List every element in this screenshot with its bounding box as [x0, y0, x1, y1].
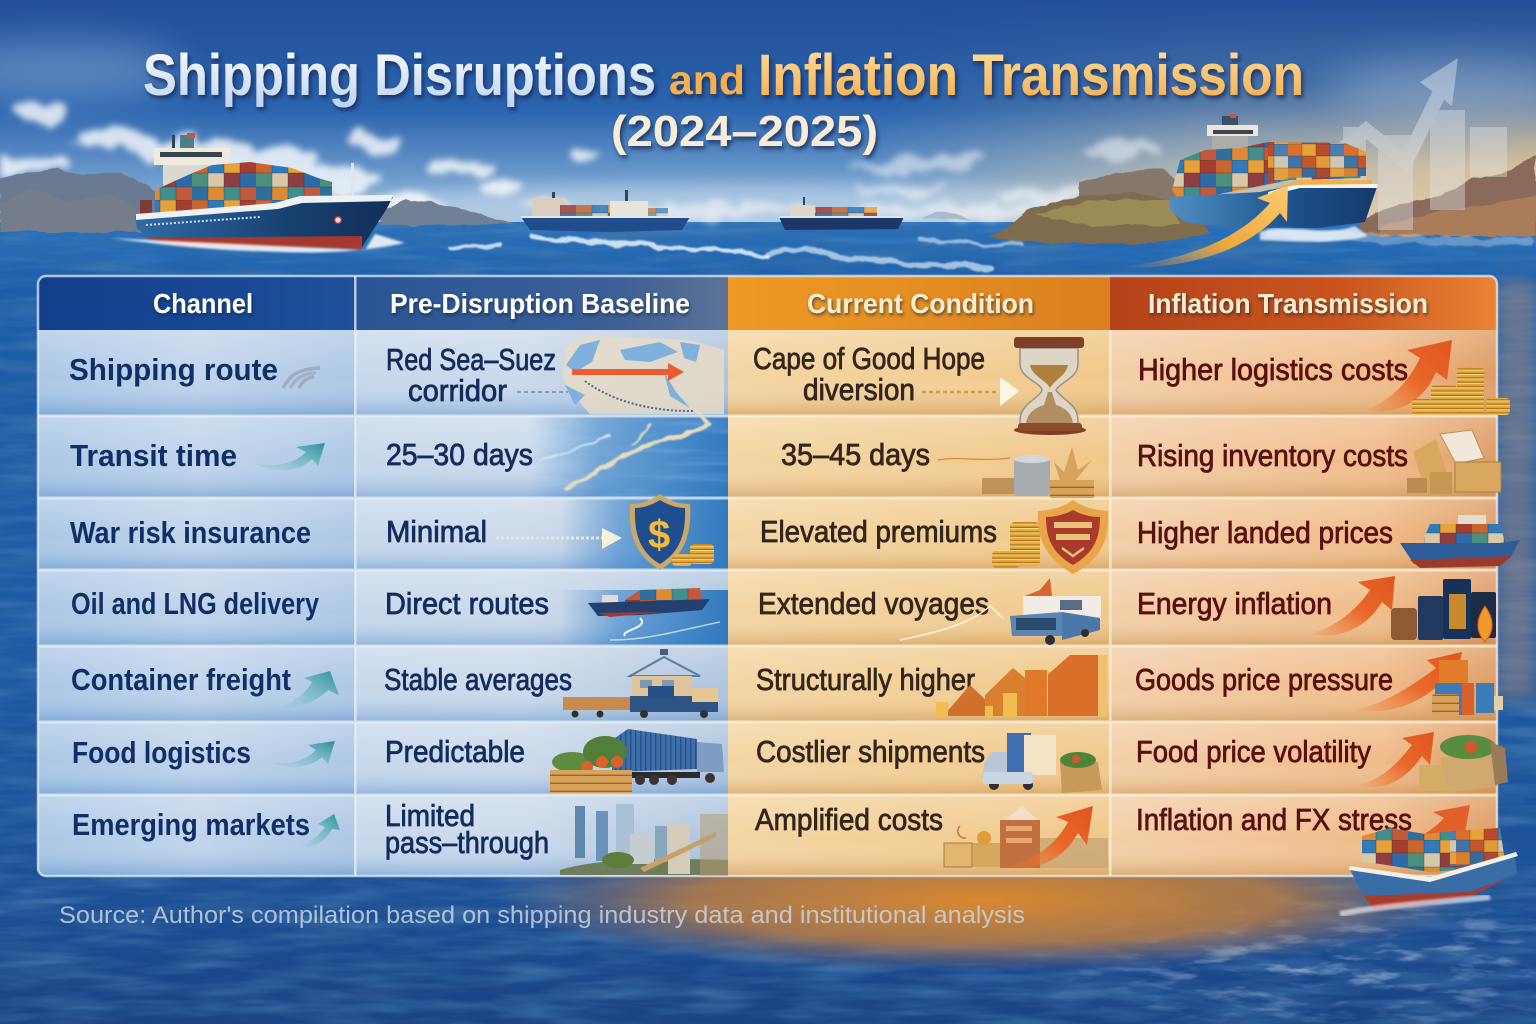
ship: large right: [1125, 114, 1378, 268]
inflation: energy inflation: Energy inflation: [1137, 586, 1332, 621]
title: and: and: [669, 57, 745, 103]
icon: truck: [900, 578, 1101, 645]
channel: emerging markets: Emerging markets: [72, 807, 310, 842]
ship: bottom right: [1340, 828, 1518, 914]
icon: rising bars and roofs: [936, 655, 1107, 718]
icon: delivery truck and bag: [982, 733, 1102, 793]
icon: shield with dollar: [630, 494, 714, 570]
header: current condition: Current Condition: [807, 288, 1034, 319]
inflation: higher logistics costs: Higher logistics costs: [1138, 352, 1408, 387]
icon: small cargo ship: [588, 588, 720, 640]
current: structurally higher: Structurally higher: [756, 662, 975, 697]
ship: large left: [110, 133, 405, 253]
current: cape of good hope diversion: Cape of Good Hope: [753, 341, 985, 376]
background: sea: [0, 222, 1536, 1024]
icon: road arrow grey: [283, 368, 320, 388]
source note: Source: Author's compilation based on shipping industry data and institutional analysis: [59, 902, 1025, 929]
icon: hourglass: [1014, 337, 1086, 435]
current: cape of good hope diversion: [753, 341, 985, 407]
current: amplified costs: Amplified costs: [755, 802, 943, 837]
icon: sea route path: [540, 412, 708, 488]
header: inflation transmission: Inflation Transmission: [1148, 288, 1428, 319]
current: cape of good hope diversion: diversion: [803, 372, 915, 407]
icon: boxes and papers: [1407, 430, 1501, 494]
icon: dashed arrow to hourglass: [922, 377, 1019, 406]
icon: route map: [517, 336, 724, 414]
icon: shield with dollar: $: [648, 513, 670, 557]
title: years: (2024–2025): [611, 107, 878, 156]
current: 35-45 days: 35–45 days: [781, 437, 930, 472]
baseline: red sea-suez corridor: [386, 342, 556, 408]
sea tints in baseline column: [530, 416, 728, 498]
background: sky: [0, 0, 1536, 240]
icon: arrow, barrels, flame: [1310, 576, 1496, 642]
baseline: limited pass-through: pass–through: [385, 825, 549, 860]
title: shipping disruptions: Shipping Disruptions: [143, 43, 656, 108]
icon: arrow rising behind ship: [1410, 805, 1470, 848]
icon: teal arrow: [255, 443, 325, 470]
table frame and cells: [38, 276, 1497, 876]
current: elevated premiums: Elevated premiums: [760, 514, 997, 549]
title: inflation transmission: Inflation Transmission: [758, 43, 1304, 108]
channel: food logistics: Food logistics: [72, 735, 251, 770]
baseline: stable averages: Stable averages: [384, 662, 572, 697]
icon: teal arrow up: [279, 671, 339, 708]
baseline: limited pass-through: [385, 798, 549, 860]
channel: shipping route: Shipping route: [69, 352, 278, 387]
icon: coins and warning shield: [992, 500, 1108, 574]
current: extended voyages: Extended voyages: [758, 586, 989, 621]
mountains left: [0, 168, 515, 232]
current: costlier shipments: Costlier shipments: [756, 734, 985, 769]
icon: food crates and truck: [550, 729, 724, 793]
icon: arrow and blocks: [1355, 652, 1503, 718]
icon: goods and crates: [938, 447, 1094, 498]
inflation: higher landed prices: Higher landed prices: [1137, 515, 1393, 550]
icon: port and trucks: [563, 649, 718, 718]
icon: dashed arrow to shield: [496, 528, 622, 549]
baseline: minimal: Minimal: [386, 514, 487, 549]
channel: oil and lng delivery: Oil and LNG delivery: [71, 586, 320, 621]
baseline: 25-30 days: 25–30 days: [386, 437, 533, 472]
ship: middle 1: [521, 190, 690, 232]
icon: crates, factory, arrow: [944, 806, 1108, 869]
icon: teal arrow food: [270, 741, 335, 767]
header: pre-disruption baseline: Pre-Disruption Baseline: [390, 288, 690, 319]
inflation: food price volatility: Food price volatility: [1136, 734, 1371, 769]
baseline: limited pass-through: Limited: [385, 798, 475, 833]
grid lines: [38, 276, 728, 876]
icon: arrow and coins: [1365, 340, 1510, 415]
baseline: direct routes: Direct routes: [385, 586, 549, 621]
baseline: predictable: Predictable: [385, 734, 525, 769]
icon: city skyline: [560, 804, 728, 876]
channel: transit time: Transit time: [70, 438, 237, 473]
channel: container freight: Container freight: [71, 662, 291, 697]
waves: [450, 232, 1530, 268]
clouds: [0, 101, 1180, 219]
title: [143, 43, 1304, 156]
ship: middle 2: [779, 197, 904, 230]
inflation: rising inventory costs: Rising inventory costs: [1137, 438, 1408, 473]
icon: teal arrow emerging: [300, 814, 340, 848]
channel: war risk insurance: War risk insurance: [70, 515, 311, 550]
header: channel: Channel: [153, 288, 253, 319]
mountains right: [920, 155, 1536, 244]
inflation: inflation and fx stress: Inflation and FX stress: [1136, 802, 1412, 837]
row shading warm: [728, 330, 1497, 876]
icon: cargo ship landed: [1400, 515, 1520, 568]
chart ghost: bars and arrow: [1318, 58, 1507, 230]
data table: [38, 276, 1520, 876]
icon: arrow and grocery bag: [1360, 732, 1508, 792]
baseline: red sea-suez corridor: Red Sea–Suez: [386, 342, 556, 377]
baseline: red sea-suez corridor: corridor: [408, 373, 507, 408]
inflation: goods price pressure: Goods price pressure: [1135, 662, 1393, 697]
row shading blue: [38, 330, 728, 876]
